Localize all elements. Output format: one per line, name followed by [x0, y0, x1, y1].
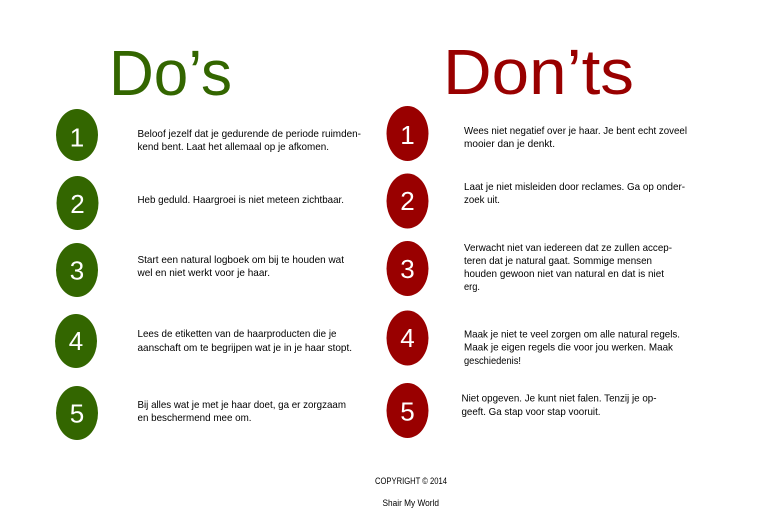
number badge 5: 5: [70, 398, 84, 428]
heading: Don'ts: Don’ts: [443, 36, 634, 108]
number badge 3: 3: [400, 254, 415, 284]
text block: geeft. Ga stap voor stap vooruit.: [462, 406, 600, 418]
text block: Heb geduld. Haargroei is niet meteen zichtbaar.: [138, 194, 344, 206]
text block: aanschaft om te begrijpen wat je in je haar stopt.: [138, 342, 352, 354]
text block: [464, 125, 687, 150]
do 3: [56, 243, 344, 297]
text block: [138, 328, 352, 354]
text block: Start een natural logboek om bij te houden wat: [138, 254, 344, 266]
footer: copyright: Shair My World: [382, 498, 439, 508]
text block: erg.: [464, 281, 480, 293]
do 4: [55, 314, 352, 368]
footer: copyright: [375, 476, 447, 508]
number badge 4: [386, 310, 428, 366]
number badge 3: [386, 241, 428, 296]
number badge 1: [386, 106, 428, 161]
number badge 1: [56, 109, 98, 161]
text block: [138, 399, 346, 424]
panel: do's list: [55, 109, 361, 440]
number badge 3: [56, 243, 98, 297]
text block: teren dat je natural gaat. Sommige mensen: [464, 255, 652, 267]
text block: Bij alles wat je met je haar doet, ga er zorgzaam: [138, 399, 346, 411]
panel: don'ts list: [386, 106, 687, 438]
text block: Maak je eigen regels die voor jou werken. Maak: [464, 342, 674, 354]
text block: Maak je niet te veel zorgen om alle natural regels.: [464, 328, 680, 340]
number badge 1: 1: [70, 122, 84, 152]
number badge 2: [386, 174, 428, 228]
text block: Lees de etiketten van de haarproducten die je: [138, 328, 337, 340]
number badge 2: 2: [400, 186, 415, 216]
text block: zoek uit.: [464, 194, 500, 206]
number badge 5: [386, 383, 428, 438]
text block: Niet opgeven. Je kunt niet falen. Tenzij je op-: [462, 392, 657, 404]
number badge 4: [55, 314, 97, 368]
heading: Do's: Do’s: [109, 37, 232, 109]
text block: en beschermend mee om.: [138, 412, 252, 424]
footer: copyright: COPYRIGHT © 2014: [375, 476, 447, 486]
don't 5: [386, 383, 657, 438]
text block: houden gewoon niet van natural en dat is niet: [464, 268, 664, 280]
don't 2: [386, 174, 685, 228]
do 1: [56, 109, 361, 161]
don't 4: [386, 310, 680, 367]
number badge 5: 5: [400, 396, 415, 426]
number badge 1: 1: [400, 120, 415, 150]
text block: wel en niet werkt voor je haar.: [137, 267, 270, 279]
text block: geschiedenis!: [464, 355, 521, 367]
number badge 2: 2: [70, 189, 85, 219]
text block: Laat je niet misleiden door reclames. Ga op onder-: [464, 181, 685, 193]
don't 1: [386, 106, 687, 161]
text block: mooier dan je denkt.: [464, 138, 555, 150]
do 5: [56, 386, 346, 440]
text block: [464, 242, 672, 293]
text block: [138, 128, 361, 153]
number badge 3: 3: [70, 256, 84, 286]
do 2: [56, 176, 344, 230]
text block: [462, 392, 657, 418]
text block: kend bent. Laat het allemaal op je afkomen.: [138, 141, 329, 153]
number badge 4: 4: [69, 326, 83, 356]
don't 3: [386, 241, 672, 296]
text block: [464, 181, 685, 206]
number badge 2: [56, 176, 98, 230]
number badge 4: 4: [400, 323, 415, 353]
text block: Beloof jezelf dat je gedurende de periode ruimden-: [138, 128, 361, 140]
number badge 5: [56, 386, 98, 440]
text block: Wees niet negatief over je haar. Je bent echt zoveel: [464, 125, 687, 137]
text block: Verwacht niet van iedereen dat ze zullen accep-: [464, 242, 672, 254]
text block: [464, 328, 680, 367]
text block: [137, 254, 344, 279]
